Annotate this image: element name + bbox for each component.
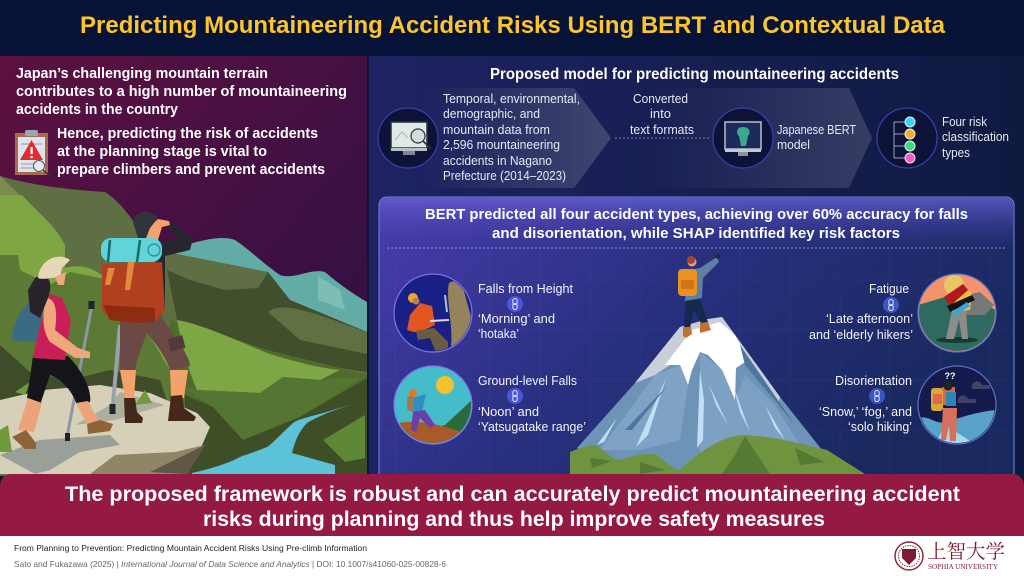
text: risk types <box>942 114 1009 160</box>
panel: proposed model <box>369 56 1024 476</box>
text: fatigue: ‘Late afternoon’ <box>826 311 913 326</box>
context text: Hence, predicting the risk of accidents <box>57 126 318 142</box>
context text <box>16 66 347 178</box>
figure: female hiker <box>12 257 113 449</box>
icon: link <box>883 297 899 313</box>
risk: fatigue <box>809 274 996 352</box>
footer <box>0 536 1024 576</box>
text: BERT model: Japanese BERT <box>777 122 856 137</box>
citation: From Planning to Prevention: Predicting Mountain Accident Risks Using Pre-climb Information <box>14 543 367 553</box>
text: risk types: types <box>942 145 970 160</box>
logo: Sophia University: 上智大学 <box>927 536 1005 564</box>
text: fatigue: and ‘elderly hikers’ <box>809 327 913 342</box>
text: disorientation: ‘Snow,’ ‘fog,’ and <box>819 404 912 419</box>
hills <box>570 435 865 474</box>
heading: results: BERT predicted all four accident types, achieving over 60% accuracy for falls <box>425 207 968 223</box>
text: converted: text formats <box>630 122 694 137</box>
text: data description <box>443 91 580 183</box>
text: ground-level falls: Ground-level Falls <box>478 373 577 388</box>
illustration: mountain with climber <box>570 253 865 474</box>
text: ground-level falls: ‘Yatsugatake range’ <box>478 419 586 434</box>
text: falls from height: ‘Morning’ and <box>478 311 555 326</box>
figure: male hiker <box>101 212 196 423</box>
heading: results <box>425 207 968 242</box>
icon: data monitor <box>378 108 438 168</box>
title bar: Predicting Mountaineering Accident Risks Using BERT and Contextual Data <box>80 12 946 39</box>
text: disorientation: ‘solo hiking’ <box>848 419 912 434</box>
text: risk types: classification <box>942 129 1009 144</box>
conclusion banner: The proposed framework is robust and can accurately predict mountaineering accident <box>65 482 960 506</box>
text: BERT model: model <box>777 137 810 152</box>
text: BERT model <box>777 122 856 152</box>
climber <box>678 253 721 338</box>
text: ground-level falls <box>478 373 586 434</box>
text: risk types: Four risk <box>942 114 987 129</box>
text: converted: Converted <box>633 91 688 106</box>
text: data description: Prefecture (2014–2023) <box>443 168 566 183</box>
text: data description: mountain data from <box>443 122 550 137</box>
arrow: data to text <box>420 88 611 188</box>
logo: Sophia University <box>895 536 1005 571</box>
text: disorientation: Disorientation <box>835 373 912 388</box>
logo: Sophia University: SOPHIA UNIVERSITY <box>928 563 998 571</box>
rock ledge <box>0 382 210 474</box>
title bar <box>0 0 1024 56</box>
text: data description: 2,596 mountaineering <box>443 137 560 152</box>
conclusion banner <box>0 474 1024 536</box>
text: converted <box>630 91 694 137</box>
icon: clipboard warning <box>15 130 50 176</box>
text: data description: Temporal, environmental, <box>443 91 580 106</box>
context text: prepare climbers and prevent accidents <box>57 162 325 178</box>
panel: BERT results <box>379 197 1014 476</box>
text: falls from height: ‘hotaka’ <box>478 326 519 341</box>
arrow: bert to classes <box>650 88 872 188</box>
icon: link <box>869 388 885 404</box>
context text: Japan’s challenging mountain terrain <box>16 66 268 82</box>
context text: accidents in the country <box>16 102 178 118</box>
context text: at the planning stage is vital to <box>57 144 267 160</box>
text: fatigue: Fatigue <box>869 281 909 296</box>
icon: four risk classes <box>877 108 937 168</box>
text: fatigue <box>809 281 913 342</box>
icon: link <box>507 388 523 404</box>
panel: context and hikers <box>0 56 367 476</box>
icon: hiker in sun <box>394 366 472 444</box>
risk: falls from height <box>394 274 573 352</box>
text: disorientation <box>819 373 912 434</box>
citation: Sato and Fukazawa (2025) | International Journal of Data Science and Analytics | DOI: 10.1007/s41060-025-00828-6 <box>14 559 446 569</box>
text: converted: into <box>650 106 671 121</box>
text: data description: accidents in Nagano <box>443 153 552 168</box>
illustration: mountain landscape <box>0 176 367 476</box>
context text: contributes to a high number of mountaineering <box>16 84 347 100</box>
heading: results: and disorientation, while SHAP identified key risk factors <box>492 226 900 242</box>
text: data description: demographic, and <box>443 106 540 121</box>
text: falls from height: Falls from Height <box>478 281 573 296</box>
heading: proposed model: Proposed model for predicting mountaineering accidents <box>490 66 899 83</box>
citation <box>14 543 446 569</box>
icon: lost hiker <box>918 366 996 444</box>
icon: BERT monitor <box>713 108 773 168</box>
conclusion banner: risks during planning and thus help improve safety measures <box>203 507 825 531</box>
risk: ground-level falls <box>394 366 586 444</box>
icon: link <box>507 296 523 312</box>
text: falls from height <box>478 281 573 341</box>
icon: climber on rock <box>394 274 472 352</box>
icon: lost hiker: ?? <box>944 371 956 381</box>
risk: disorientation <box>819 366 996 444</box>
icon: tired hiker <box>918 274 996 352</box>
text: ground-level falls: ‘Noon’ and <box>478 404 539 419</box>
